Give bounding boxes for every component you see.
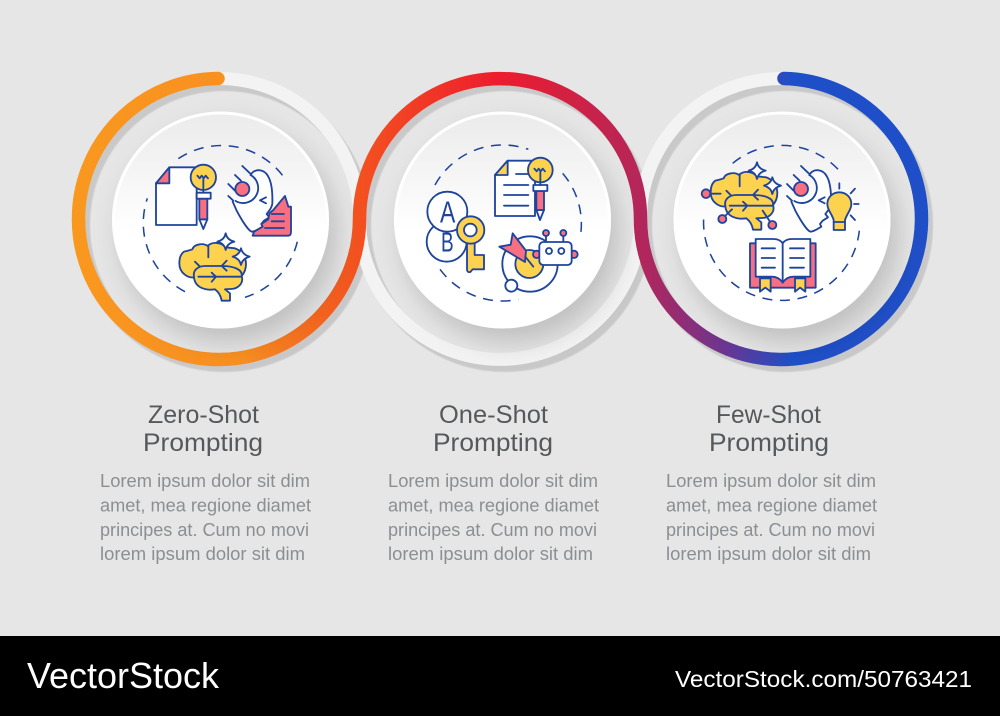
icon: robot face with document [228,166,291,236]
panel: step 3 disc [675,113,889,327]
panel: step 2 disc [396,113,610,327]
heading [709,401,829,457]
footer image id: VectorStock.com/50763421 [675,666,972,692]
body text: lorem ipsum dolor sit dim [388,543,593,564]
icon: open book [750,239,816,292]
icon: brain with sparkles [179,233,250,301]
icon: A B choices with key: B [441,227,454,258]
body text [666,470,877,564]
ring shadows [84,84,927,366]
icon group: one-shot prompting [427,145,581,301]
column: zero-shot text [100,401,311,564]
body text [388,470,599,564]
icon: document with bulb pen [495,158,553,220]
column: few-shot text [666,401,877,564]
body text: lorem ipsum dolor sit dim [100,543,305,564]
icon: document with bulb pen [156,165,216,229]
column: one-shot text [388,401,599,564]
pale ring segments [219,78,781,359]
heading: Zero-Shot [148,401,259,429]
body text: principes at. Cum no movi [388,519,597,540]
icon: A B choices with key [427,192,484,272]
body text: amet, mea regione diamet [666,494,877,516]
icon: A B choices with key: A [440,196,456,230]
icon: target with arrow and robot [499,230,578,292]
body text: Lorem ipsum dolor sit dim [388,470,598,491]
heading [433,401,553,457]
body text: principes at. Cum no movi [100,519,309,540]
footer bar [0,636,1000,716]
panel: step 1 disc [114,113,328,327]
body text [100,470,311,564]
body text: amet, mea regione diamet [388,494,599,516]
heading: Prompting [709,429,829,457]
icon: robot face with bulb [787,166,859,232]
body text: Lorem ipsum dolor sit dim [666,470,876,491]
heading: Prompting [433,429,553,457]
body text: amet, mea regione diamet [100,494,311,516]
heading: One-Shot [439,401,548,429]
icon: brain with nodes [702,162,781,230]
heading: Prompting [143,429,263,457]
gradient ribbon connecting the three steps [78,78,922,359]
heading [143,401,263,457]
body text: principes at. Cum no movi [666,519,875,540]
heading: Few-Shot [716,401,821,429]
body text: lorem ipsum dolor sit dim [666,543,871,564]
icon group: few-shot prompting [702,145,859,300]
icon group: zero-shot prompting [143,146,297,301]
body text: Lorem ipsum dolor sit dim [100,470,310,491]
footer logo: VectorStock [27,655,220,696]
